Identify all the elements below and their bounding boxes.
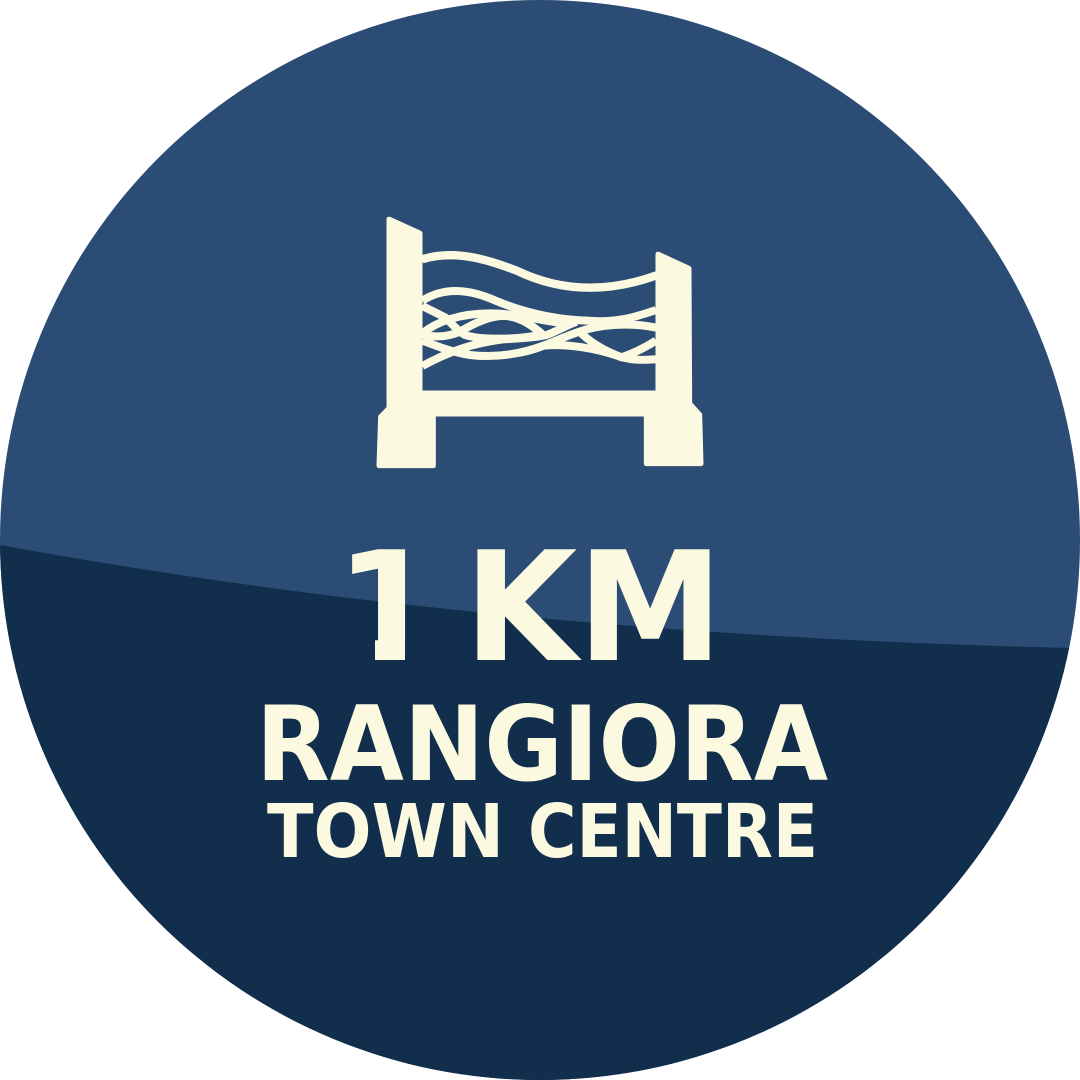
icon: bridge: [377, 217, 703, 468]
subtitle: Town Centre: TOWN: [267, 789, 504, 875]
distance heading: 1 KM: [352, 549, 710, 660]
distance heading: 1 KM: KM: [464, 519, 723, 696]
place name: Rangiora: RANGIORA: [256, 685, 828, 805]
subtitle: Town Centre: CENTRE: [528, 789, 818, 875]
distance heading: 1 KM: 1: [335, 519, 441, 696]
subtitle: Town Centre: [267, 789, 818, 875]
